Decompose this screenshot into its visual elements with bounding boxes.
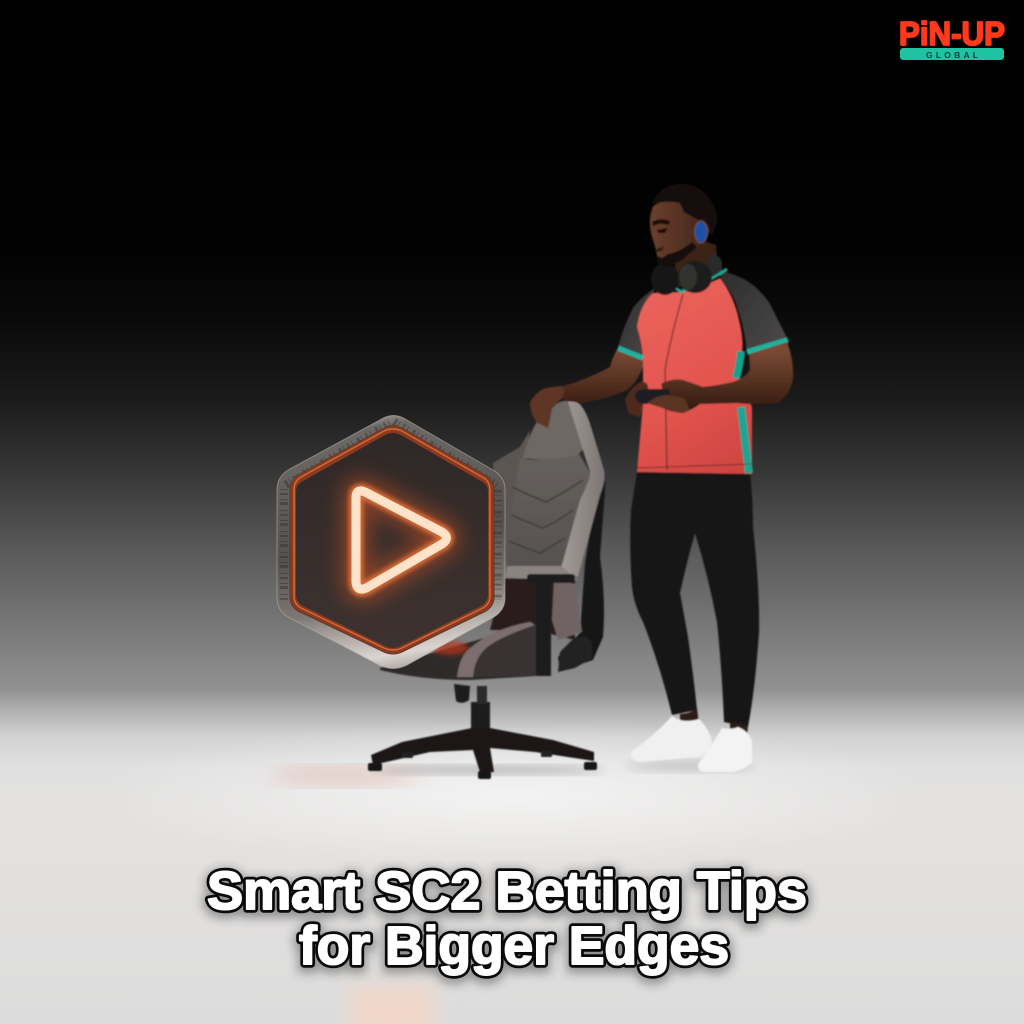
shirt sleeves	[618, 270, 788, 360]
gaming chair	[368, 400, 605, 779]
title line two outline: for Bigger Edges	[299, 916, 729, 976]
neck	[675, 240, 718, 290]
chair backrest panel	[507, 452, 590, 566]
chair seat shadow	[490, 578, 575, 640]
title line two: for Bigger Edges	[299, 916, 729, 976]
title shadow: Smart SC2 Betting Tips	[207, 864, 807, 924]
floor shadow and red glow	[270, 761, 755, 783]
game controller	[635, 389, 670, 404]
right arm	[647, 342, 793, 413]
chair seat band	[505, 566, 578, 580]
frame texture	[284, 421, 498, 600]
title shadow: for Bigger Edges	[299, 919, 729, 979]
chair headrest	[523, 400, 586, 459]
chair lower bolster	[552, 580, 582, 640]
chair seat underside	[380, 624, 537, 680]
logo subtitle: GLOBAL	[926, 50, 978, 60]
chair seat cushion	[457, 622, 536, 677]
hexagon orange rim	[290, 426, 494, 654]
chair side wing	[493, 430, 530, 565]
head	[650, 184, 717, 267]
shirt teal trim	[618, 269, 788, 473]
title shadow	[207, 864, 807, 979]
other hand	[625, 382, 648, 417]
blue earpiece	[694, 221, 708, 243]
logo teal bar	[900, 48, 1004, 60]
chair armrest	[527, 574, 575, 676]
chair backrest quilting	[509, 480, 583, 553]
red glow on seat	[432, 641, 468, 655]
shirt body	[637, 278, 752, 474]
shoes	[631, 708, 752, 772]
title line one outline: Smart SC2 Betting Tips	[207, 861, 807, 921]
hexagon metal frame	[277, 416, 505, 668]
floor light	[92, 720, 932, 870]
title line one: Smart SC2 Betting Tips	[207, 861, 807, 921]
logo	[899, 15, 1005, 60]
pants	[630, 471, 759, 727]
chair mechanism	[558, 636, 592, 672]
title	[207, 861, 807, 979]
hexagon dark face	[296, 433, 488, 648]
person	[540, 184, 793, 772]
hand over controller	[647, 395, 690, 413]
left upper arm	[540, 348, 645, 403]
headphones	[651, 254, 722, 295]
hexagon rim glow	[294, 429, 490, 650]
hand on chair	[530, 386, 564, 428]
chair base	[368, 684, 597, 779]
hexagon play badge	[277, 416, 505, 668]
logo wordmark: PiN-UP	[899, 15, 1005, 52]
floor reflection glow	[350, 985, 435, 1024]
chair rear frame	[558, 470, 605, 671]
play icon	[356, 491, 446, 589]
chair bolster	[560, 400, 604, 577]
